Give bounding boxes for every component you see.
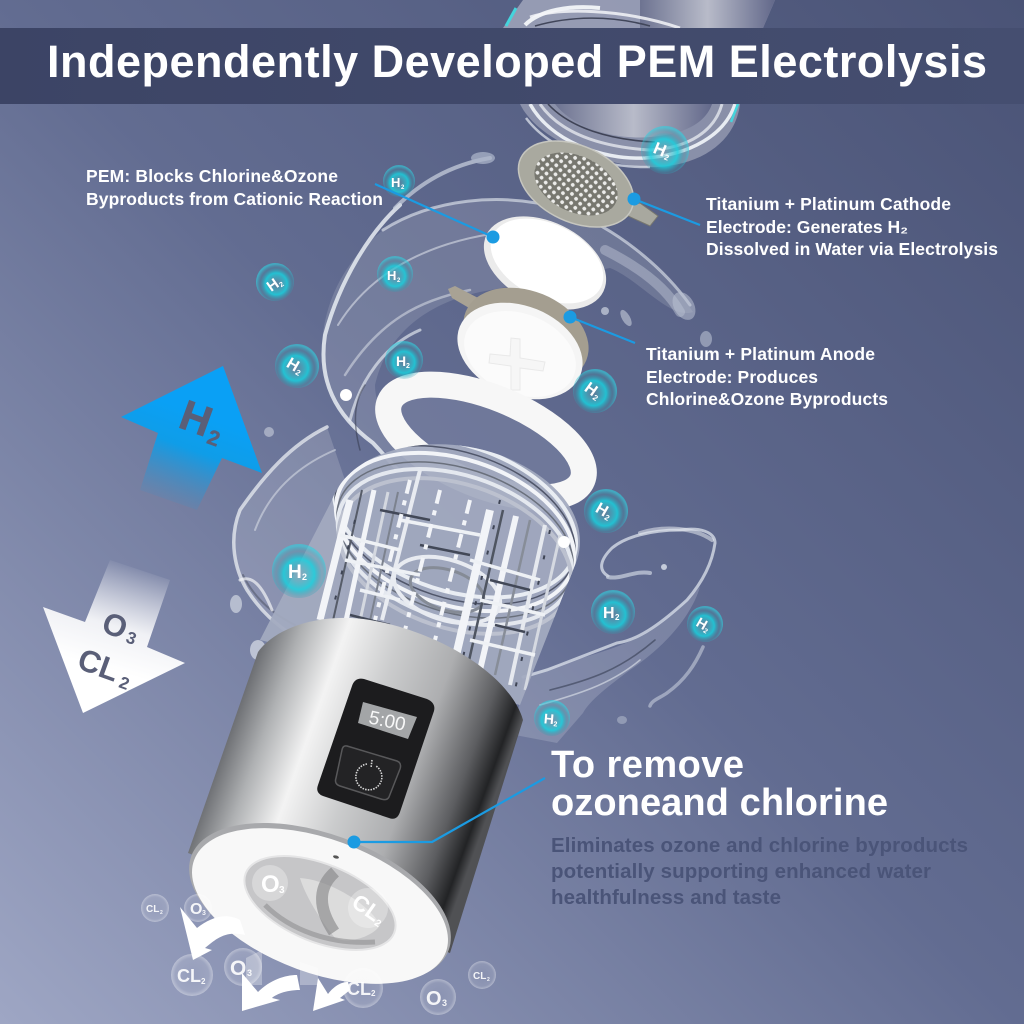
label: cathode: Dissolved in Water via Electrolysis [706, 239, 998, 259]
bubble: 2 [278, 281, 286, 289]
lower right swirl band [515, 587, 700, 743]
bubble: 2 [663, 153, 671, 163]
callout heading: To remove [551, 744, 744, 786]
power button [336, 746, 401, 800]
callout description: Eliminates ozone and chlorine byproducts [551, 834, 968, 857]
bubble: 2 [615, 613, 620, 622]
bubble CL2 small: 2 [487, 977, 490, 983]
bubble O3 right [420, 979, 456, 1015]
bubble [680, 599, 730, 649]
bubble O3 mid [224, 948, 262, 986]
bubble O3 in opening: O [261, 871, 280, 898]
bubble: H [288, 562, 302, 583]
upper swirl [322, 200, 693, 470]
white rim dots [340, 389, 570, 548]
bubble: 2 [702, 628, 709, 636]
leader dots [348, 192, 640, 848]
power icon [356, 760, 382, 790]
PEM membrane disc [469, 198, 621, 328]
bubble: 2 [591, 393, 600, 403]
control panel [317, 679, 434, 819]
byproduct bubbles [141, 894, 496, 1015]
label: cathode: Electrode: Generates H₂ [706, 217, 908, 237]
bubble CL2 in opening: CL [347, 889, 386, 926]
label: anode: Chlorine&Ozone Byproducts [646, 389, 888, 409]
top glass bottle [503, 0, 775, 167]
droplet stream top [395, 158, 490, 208]
bubble: 2 [603, 513, 612, 523]
bubble O3 mid: 3 [247, 968, 252, 978]
bubble CL2: CL [146, 904, 159, 915]
bubble: H [264, 275, 282, 295]
small notch [333, 855, 339, 859]
callout description: healthfulness and taste [551, 886, 781, 909]
blue up arrow [121, 366, 262, 510]
arrow label: 2 [204, 426, 223, 451]
bubble: H [592, 500, 611, 520]
bubble CL2 in opening: 2 [372, 918, 383, 930]
bubble [591, 590, 635, 634]
bubble CL2 large [171, 954, 213, 996]
arrow label: 3 [124, 628, 139, 649]
bubble: H [581, 380, 600, 400]
cathode disc [505, 124, 658, 244]
arrow label [73, 605, 139, 694]
label: cathode [706, 194, 998, 259]
bubble CL2 large: 2 [201, 977, 206, 986]
bubble CL2 small [468, 961, 496, 989]
bubble: H [387, 268, 396, 283]
bubble CL2 in opening [340, 880, 396, 936]
bubble: H [651, 138, 669, 161]
callout description: potentially supporting enhanced water [551, 860, 931, 883]
bubble O3 [184, 894, 212, 922]
bubble CL2 right: 2 [371, 989, 376, 998]
callout heading: ozoneand chlorine [551, 782, 888, 824]
bubble: 2 [302, 572, 307, 582]
bubble CL2 large: CL [177, 966, 201, 986]
bubble O3 in opening: 3 [279, 885, 285, 896]
bubble [383, 165, 415, 197]
bubble CL2 small: CL [473, 971, 486, 982]
bubble [249, 256, 301, 308]
bubble: 2 [553, 721, 558, 728]
bubble: H [543, 710, 555, 727]
water swirls [230, 152, 715, 743]
callout description [551, 834, 968, 909]
bubble CL2: 2 [160, 910, 163, 916]
right splash [605, 250, 680, 312]
label: anode [646, 344, 888, 409]
label: anode: Titanium + Platinum Anode [646, 344, 875, 364]
lower left swirl [234, 427, 345, 640]
header band [0, 28, 1024, 104]
bubble: 2 [397, 278, 401, 284]
callout heading [551, 744, 888, 824]
anode electrode [443, 270, 603, 417]
bubble [634, 119, 696, 181]
label: PEM: PEM: Blocks Chlorine&Ozone [86, 166, 338, 186]
bubble O3 right: O [426, 988, 442, 1010]
bubble CL2 right [343, 968, 383, 1008]
bubble: H [391, 175, 400, 190]
bubble CL2 [141, 894, 169, 922]
label: cathode: Titanium + Platinum Cathode [706, 194, 951, 214]
arrow label: 2 [117, 673, 132, 694]
opening [231, 837, 409, 969]
title: Independently Developed PEM Electrolysis [47, 36, 987, 87]
arrow label: H [174, 391, 218, 445]
arrow label: O [98, 605, 132, 646]
bubble CL2 right: CL [347, 979, 371, 999]
bubble O3: 3 [202, 910, 206, 917]
label: PEM: Byproducts from Cationic Reaction [86, 189, 383, 209]
bubble [377, 256, 413, 292]
bubble O3: O [190, 901, 202, 918]
bubble: H [603, 605, 615, 622]
bubble: H [694, 614, 710, 633]
white sealing ring [373, 361, 599, 521]
device body [188, 618, 523, 953]
bubble [576, 481, 636, 541]
bubble [385, 341, 423, 379]
leader lines [354, 184, 700, 842]
arrow label: CL [73, 642, 124, 689]
white down arrow [43, 560, 185, 713]
bubble O3 right: 3 [442, 998, 447, 1008]
glass core [260, 444, 580, 705]
label: PEM [86, 166, 383, 209]
bubble: H [283, 355, 302, 375]
label: anode: Electrode: Produces [646, 367, 818, 387]
bubble [532, 698, 572, 738]
bubble [267, 336, 327, 396]
bubble: H [396, 353, 406, 369]
bubble [272, 544, 326, 598]
display time: 5:00 [367, 708, 407, 736]
device white end ring [168, 791, 472, 1015]
bubble O3 in opening [252, 865, 288, 901]
bubble [564, 360, 626, 422]
bubble: 2 [294, 368, 303, 378]
bubble: 2 [406, 363, 410, 370]
white chevron arrows [180, 907, 350, 1011]
bubble: 2 [401, 185, 405, 191]
H2 bubbles [249, 119, 730, 738]
bubble O3 mid: O [230, 957, 246, 980]
display [358, 702, 417, 739]
